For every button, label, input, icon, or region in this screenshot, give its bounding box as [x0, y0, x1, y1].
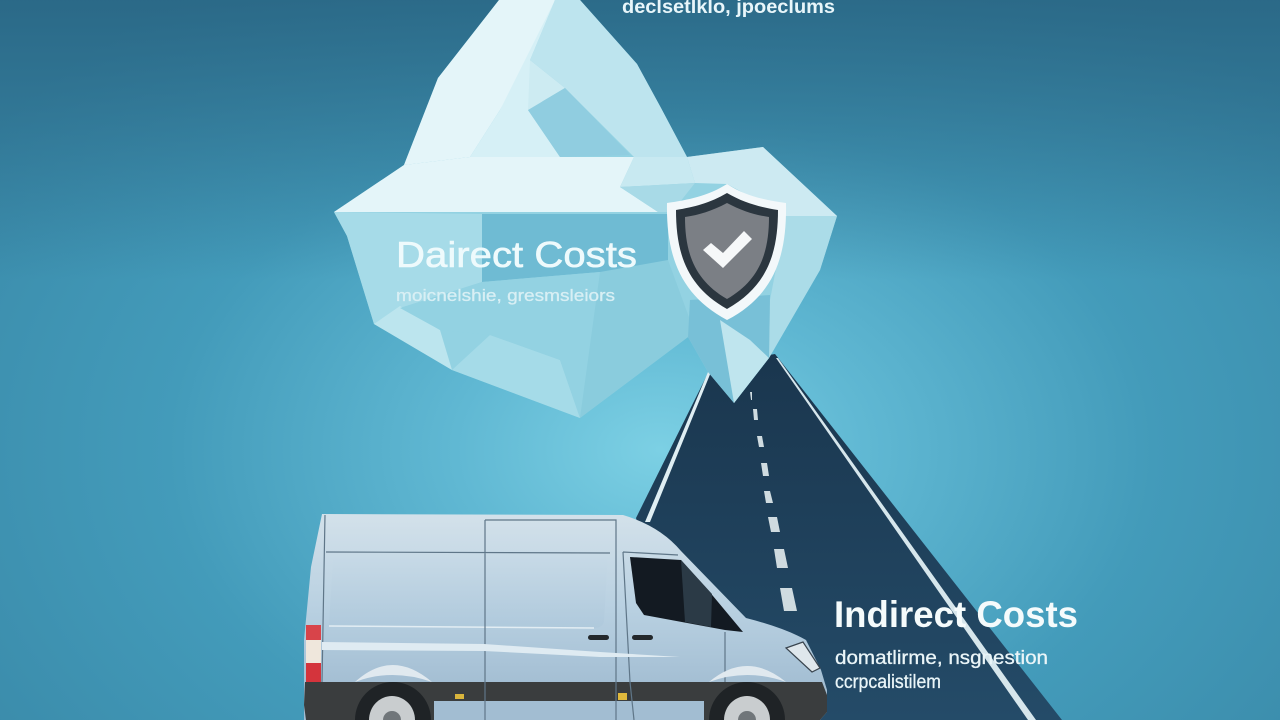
highlight stripe — [322, 642, 680, 657]
door seams — [322, 515, 725, 720]
description: domatlirme, nsgnestion — [835, 648, 1048, 669]
tail light — [306, 625, 321, 682]
van body — [304, 514, 827, 720]
road — [636, 354, 1062, 720]
van — [304, 514, 827, 720]
road edge line left — [645, 372, 711, 522]
label: direct costs — [396, 234, 637, 305]
rear wheel arch — [355, 665, 432, 682]
iceberg upper facets — [334, 0, 837, 216]
front wheel — [709, 682, 785, 720]
iceberg — [334, 0, 837, 418]
description: moicnelshie, gresmsleiors — [396, 286, 615, 305]
road centre dashes — [750, 392, 797, 611]
check mark — [703, 231, 752, 268]
road edge line right — [776, 358, 1036, 720]
cab window — [630, 557, 743, 632]
rear wheel — [355, 682, 431, 720]
heading: Indirect Costs — [834, 594, 1078, 635]
heading: Dairect Costs — [396, 234, 637, 275]
shield icon with check — [667, 184, 786, 320]
front wheel arch — [709, 666, 786, 682]
van lower trim — [304, 682, 827, 720]
panel lower highlight — [329, 626, 594, 628]
label: indirect costs — [834, 594, 1078, 693]
door handles — [588, 635, 609, 640]
iceberg lower facets — [334, 212, 837, 418]
side markers — [455, 694, 464, 699]
label: indirect costs: ccrpcalistilem — [835, 672, 941, 693]
headlight — [786, 642, 820, 672]
side panel — [329, 558, 608, 628]
